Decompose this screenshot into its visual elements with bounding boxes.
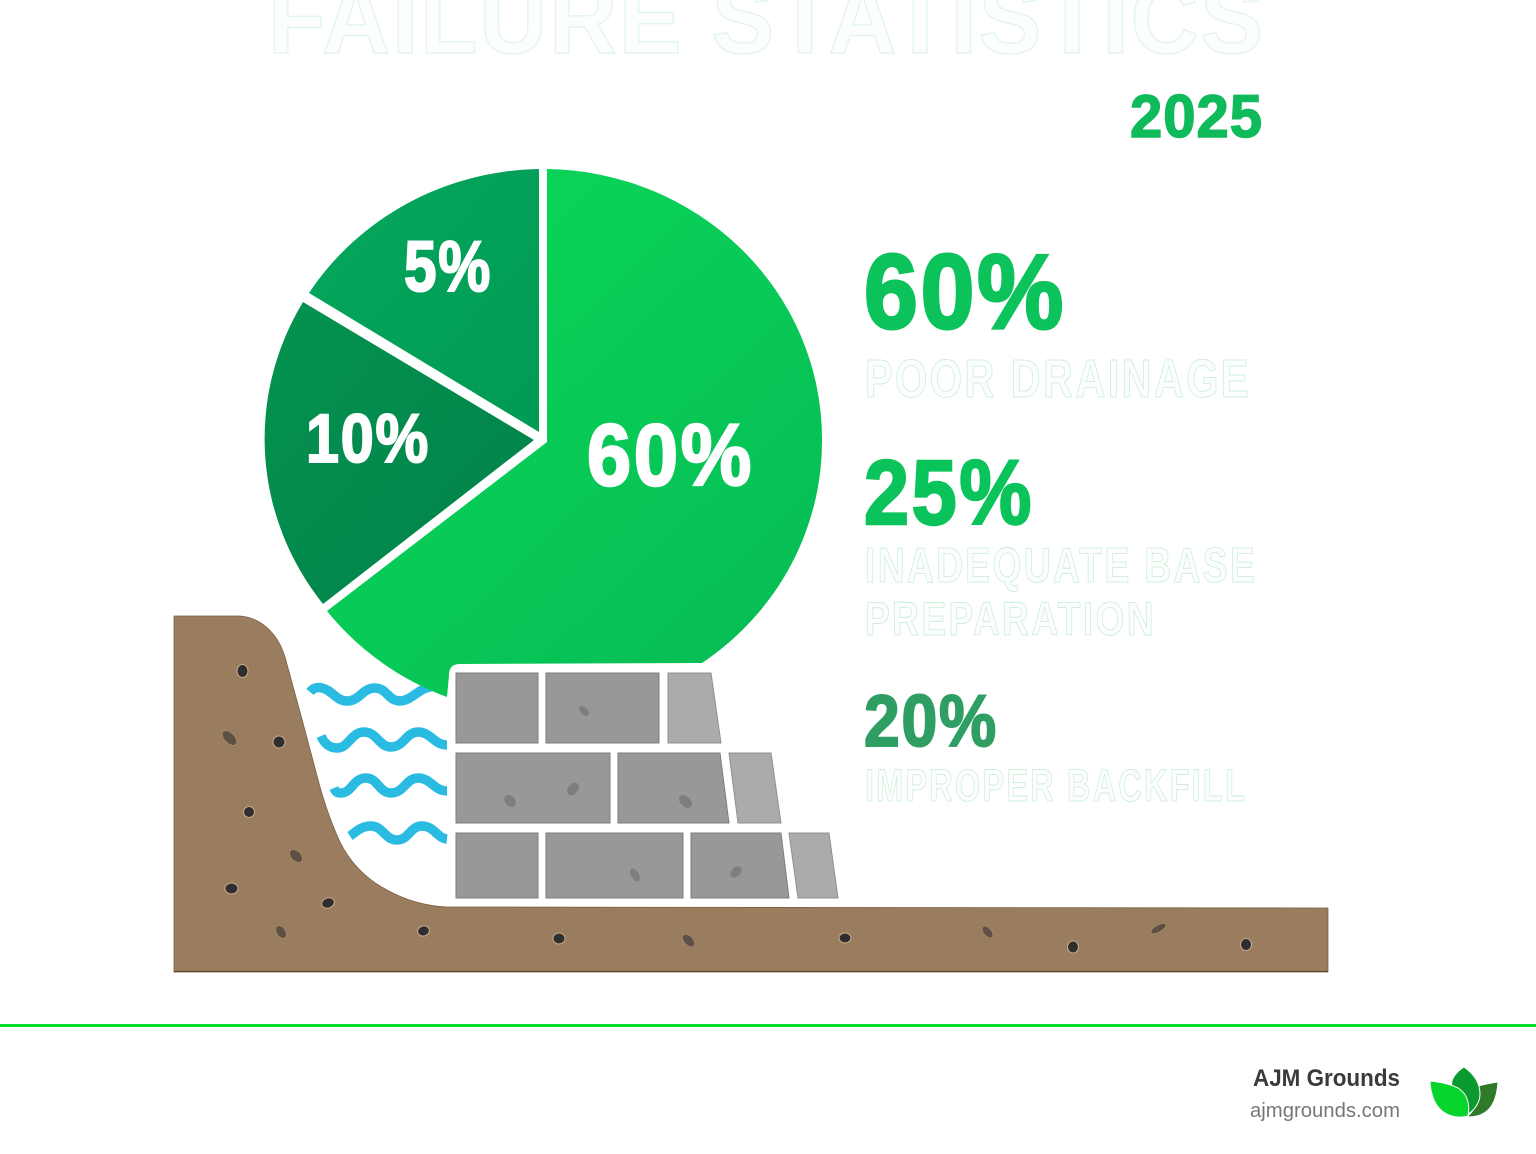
water waves [310,684,447,840]
icon: leaves logo [1430,1067,1498,1117]
stat: 25% inadequate base preparation [864,442,1257,645]
year: 2025 [1130,83,1263,150]
footer brand text: ajmgrounds.com [1250,1099,1400,1122]
stat: 20% improper backfill: IMPROPER BACKFILL [865,760,1247,811]
footer brand text: AJM Grounds [1253,1065,1400,1092]
slice: 60% [327,169,822,697]
slice: 10% [265,302,534,604]
stat: 20% improper backfill [864,681,1247,811]
stat: 20% improper backfill: 20% [864,681,998,762]
stat: 60% poor drainage: POOR DRAINAGE [865,349,1251,409]
slice: 5% [309,169,539,432]
soil with embedded rocks [174,616,1328,972]
slice: 10%: 10% [306,400,430,477]
slice: 60%: 60% [587,407,754,504]
footer divider [0,1024,1536,1027]
retaining wall bricks [456,673,838,898]
stat: 25% inadequate base preparation: PREPARATION [865,592,1156,645]
stat: 25% inadequate base preparation: 25% [864,442,1034,544]
stat: 60% poor drainage [864,233,1251,409]
slice: 5%: 5% [404,228,492,307]
footer brand text [1250,1065,1400,1122]
stat: 25% inadequate base preparation: INADEQUATE BASE [865,539,1257,593]
pie chart [265,169,822,697]
stat: 60% poor drainage: 60% [864,233,1066,351]
